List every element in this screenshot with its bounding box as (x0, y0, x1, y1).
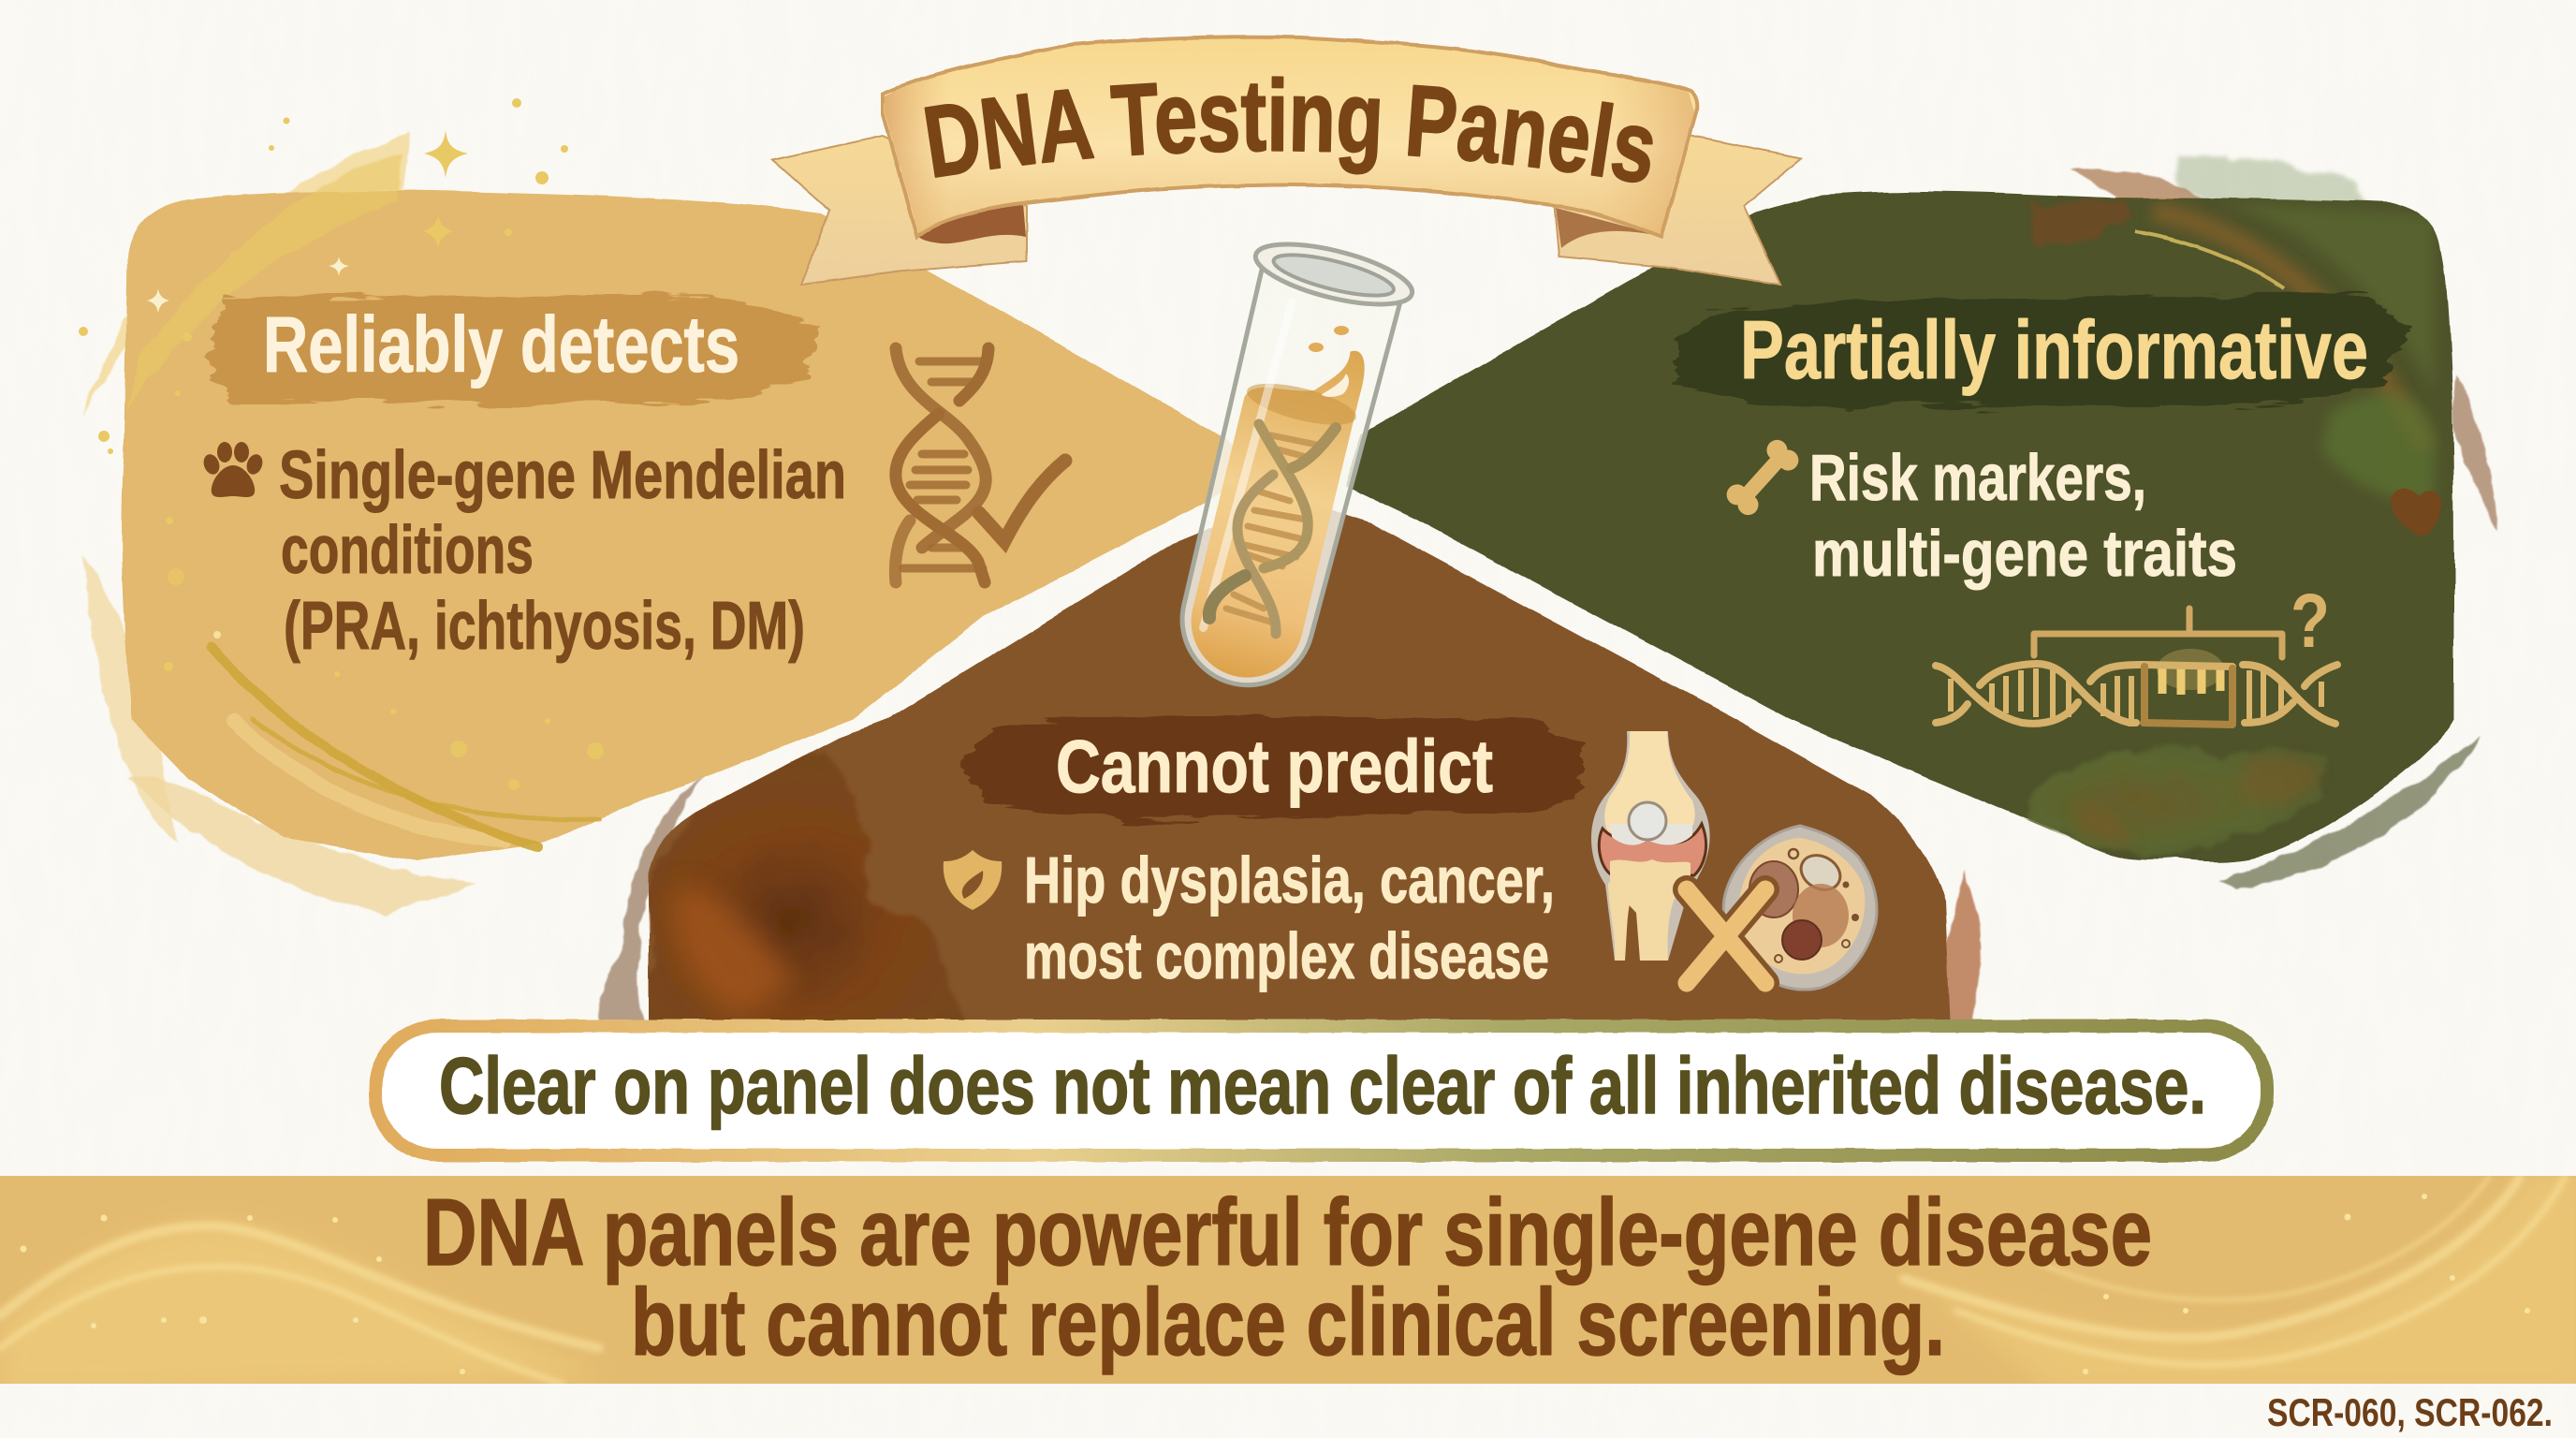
orange bleed (673, 888, 796, 1016)
text: single-gene conditions: Single-gene Mendelian (279, 438, 846, 513)
icon: paw (201, 442, 265, 497)
heading: DNA Testing Panels: DNA Testing Panels (925, 76, 1653, 183)
left ribbon fold (917, 203, 1026, 243)
central test tube (1154, 232, 1417, 702)
green panel shape (1345, 192, 2454, 861)
right ribbon tail (1555, 136, 1801, 285)
ribbon body (883, 37, 1697, 237)
callout ring (375, 1026, 2267, 1155)
icon: shield (944, 850, 1002, 910)
bubbles (1309, 326, 1349, 352)
icon: cross mark (1687, 889, 1765, 983)
callout: clear on panel (375, 1026, 2267, 1155)
text: hip dysplasia (1024, 844, 1555, 992)
text: single-gene conditions: (PRA, ichthyosis, DM) (284, 589, 805, 664)
takeaway text (423, 1181, 2152, 1375)
text: risk markers (1809, 441, 2237, 590)
takeaway text: but cannot replace clinical screening. (631, 1270, 1945, 1375)
heading brush: reliably detects (204, 296, 824, 404)
green and brown strokes outside panel (2071, 154, 2497, 889)
heading: Reliably detects: Reliably detects (263, 301, 739, 389)
text: hip dysplasia: most complex disease (1024, 919, 1549, 992)
icon: cell (1723, 826, 1877, 990)
sparkles and gold dots (79, 98, 604, 790)
icon: DNA segment with bracket and question mark (1936, 579, 2337, 725)
gold panel shape (122, 190, 1256, 861)
left ribbon tail (772, 136, 1027, 285)
gold leaf streaks bottom (211, 646, 599, 847)
gold leaf streak top (126, 154, 402, 412)
heading: Partially informative: Partially informative (1740, 303, 2368, 396)
icon: DNA segment with bracket and question mark: ? (2291, 579, 2330, 664)
icon: knee joint (1591, 731, 1710, 961)
curved baseline for title (930, 151, 1652, 184)
heading brush: partially informative (1671, 292, 2410, 408)
text: single-gene conditions: conditions (281, 513, 534, 588)
ribbon end shading (885, 38, 1694, 234)
brown panel shape (649, 496, 1951, 1030)
text: risk markers: Risk markers, (1809, 441, 2146, 514)
takeaway text: DNA panels are powerful for single-gene disease (423, 1181, 2152, 1285)
dark watercolour stain (646, 749, 973, 1039)
panel: partially informative (1345, 154, 2497, 889)
brown brush strokes outside panel (598, 775, 1981, 1025)
heading brush: cannot predict (964, 713, 1587, 822)
text: single-gene conditions (279, 438, 846, 664)
gold wave decoration (0, 1170, 2576, 1395)
tube glass and liquid (1154, 232, 1417, 702)
green panel stains (2027, 198, 2441, 857)
panel: cannot predict (598, 496, 1981, 1039)
text: hip dysplasia: Hip dysplasia, cancer, (1024, 844, 1555, 917)
gold brush strokes behind panel (82, 132, 476, 913)
panel: reliably detects (79, 98, 1256, 913)
right ribbon fold (1556, 208, 1661, 248)
takeaway band (0, 1170, 2576, 1395)
heading: Cannot predict: Cannot predict (1056, 725, 1493, 808)
DNA inside tube (1209, 424, 1336, 634)
icon: DNA with check (895, 348, 1065, 582)
icon: bone (1722, 435, 1803, 520)
text: risk markers: multi-gene traits (1812, 517, 2237, 590)
title banner (770, 35, 1803, 286)
